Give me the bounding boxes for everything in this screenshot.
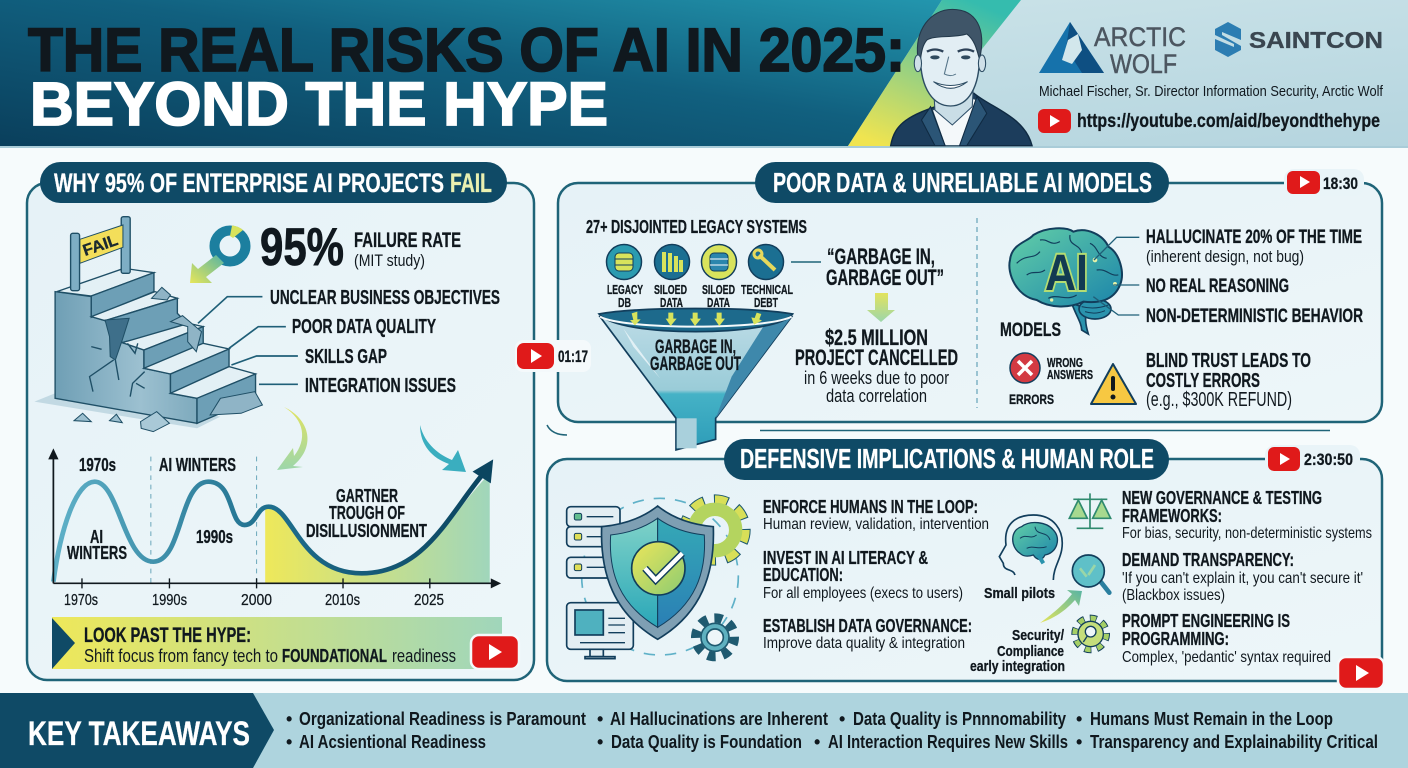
- takeaways row two: •: [286, 732, 292, 752]
- stat source: (MIT study): [354, 251, 425, 270]
- model failure list: [1146, 227, 1363, 327]
- labels: legacy sources: SILOED: [702, 282, 735, 297]
- takeaways row one: •: [839, 709, 845, 729]
- icon: prompt gear: [1075, 619, 1106, 649]
- model failure list: NO REAL REASONING: [1146, 276, 1289, 297]
- takeaways row one: •: [286, 709, 292, 729]
- icon: head with brain: [999, 515, 1062, 580]
- labels: security compliance: Compliance: [997, 643, 1064, 660]
- chart: AI hype cycle: 2025: [414, 592, 444, 609]
- heading: defensive implications: DEFENSIVE IMPLICATIONS & HUMAN ROLE: [740, 443, 1154, 474]
- video timestamp 01:17: 01:17: [558, 347, 588, 366]
- quote: garbage in garbage out: “GARBAGE IN,: [827, 244, 935, 269]
- arrow: up to magnifier: [1040, 590, 1082, 623]
- logo: Arctic Wolf: WOLF: [1110, 49, 1177, 79]
- speaker portrait: [891, 9, 1032, 146]
- icon: YouTube button: [471, 635, 519, 669]
- callout: look past the hype: LOOK PAST THE HYPE:: [84, 624, 251, 647]
- callouts: failure causes: INTEGRATION ISSUES: [305, 375, 456, 397]
- icon: legacy database: [606, 244, 642, 280]
- icon: siloed data database: [702, 244, 736, 280]
- text: blind trust: (e.g., $300K REFUND): [1146, 389, 1292, 411]
- list: right actions: NEW GOVERNANCE & TESTING: [1122, 488, 1322, 508]
- heading: why 95% fail: [40, 162, 507, 203]
- callout: look past the hype: Shift focus from fancy tech to: [84, 646, 278, 666]
- chart: AI hype cycle: TROUGH OF: [329, 503, 405, 523]
- panel: poor data and unreliable models: [558, 162, 1382, 450]
- list: right actions: PROMPT ENGINEERING IS: [1122, 611, 1290, 631]
- takeaways row one: Humans Must Remain in the Loop: [1090, 709, 1333, 729]
- logo: Arctic Wolf: [1039, 22, 1186, 79]
- labels: legacy sources: DEBT: [754, 295, 778, 310]
- funnel label: GARBAGE OUT: [650, 354, 741, 375]
- list: left actions: ESTABLISH DATA GOVERNANCE:: [763, 616, 972, 636]
- video timestamp 2:30:50: 2:30:50: [1304, 450, 1353, 469]
- heading: poor data: POOR DATA & UNRELIABLE AI MODELS: [773, 167, 1152, 198]
- icon: balance scales: [1069, 493, 1111, 528]
- chart: AI hype cycle: AI WINTERS: [159, 455, 236, 475]
- labels: wrong answers: WRONG: [1047, 355, 1083, 370]
- callout: look past the hype: FOUNDATIONAL: [282, 646, 387, 666]
- chart: AI hype cycle: DISILLUSIONMENT: [306, 521, 427, 541]
- title line two: BEYOND THE HYPE: [30, 70, 608, 138]
- icon: magnifying glass: [1072, 555, 1109, 593]
- arrow: yellow curved: [277, 407, 308, 470]
- list: right actions: PROGRAMMING:: [1122, 629, 1229, 649]
- labels: legacy sources: DATA: [707, 295, 730, 310]
- labels: legacy sources: DB: [618, 295, 631, 310]
- icon: YouTube link: [1038, 109, 1071, 133]
- chart: AI hype cycle: GARTNER: [336, 486, 398, 506]
- list: right actions: DEMAND TRANSPARENCY:: [1122, 550, 1294, 570]
- arrow: down to cost: [867, 293, 895, 322]
- list: right actions: 'If you can't explain it, you can't secure it': [1122, 570, 1363, 587]
- labels: wrong answers: ERRORS: [1009, 391, 1054, 407]
- connector arc: [547, 425, 567, 435]
- stat: project cancelled: in 6 weeks due to poor: [804, 368, 949, 388]
- list: left actions: INVEST IN AI LITERACY &: [763, 548, 928, 568]
- list: left actions: Improve data quality & integration: [763, 635, 965, 652]
- stat: project cancelled: $2.5 MILLION: [825, 325, 928, 350]
- footer: key takeaways: [0, 693, 1408, 768]
- icon: AI brain: AI: [1045, 244, 1088, 301]
- quote: garbage in garbage out: GARBAGE OUT”: [826, 265, 944, 290]
- labels: legacy sources: SILOED: [654, 282, 687, 297]
- list: left actions: Human review, validation, intervention: [763, 516, 989, 533]
- icon: technical debt wrench: [748, 244, 784, 280]
- labels: security compliance: Security/: [1012, 627, 1065, 644]
- video timestamp 18:30: 18:30: [1323, 174, 1358, 193]
- chart: AI hype cycle: 1970s: [79, 455, 116, 475]
- label: models: MODELS: [1000, 320, 1061, 341]
- list: right actions: Complex, 'pedantic' syntax required: [1122, 649, 1331, 666]
- text: blind trust: COSTLY ERRORS: [1146, 370, 1260, 392]
- takeaways row one: Organizational Readiness is Paramount: [299, 709, 586, 729]
- takeaways row two: AI Acsientional Readiness: [299, 732, 486, 752]
- takeaways row one: •: [597, 709, 603, 729]
- labels: legacy sources: TECHNICAL: [741, 282, 793, 297]
- labels: security compliance: [970, 627, 1065, 675]
- takeaways row one: Data Quality is Pnnnomability: [853, 709, 1066, 729]
- icon: security shield with gears and servers: [567, 498, 744, 659]
- chart: AI hype cycle: 1970s: [64, 592, 98, 609]
- video timestamp 01:17: [515, 340, 591, 372]
- heading: defensive implications: [724, 439, 1169, 480]
- takeaways row one: AI Hallucinations are Inherent: [610, 709, 828, 729]
- header banner: [0, 0, 1408, 148]
- labels: legacy sources: LEGACY: [607, 282, 643, 297]
- panel: why projects fail: [27, 162, 534, 680]
- stat label: failure rate: FAILURE RATE: [354, 229, 461, 252]
- icon: warning triangle: [1091, 364, 1136, 404]
- arrow: teal curved: [420, 425, 466, 472]
- video timestamp 18:30: [1284, 169, 1364, 196]
- icon: failure donut: [214, 226, 246, 262]
- icon: siloed data bars: [654, 244, 690, 280]
- stat: project cancelled: data correlation: [826, 386, 927, 406]
- funnel label: GARBAGE IN,: [655, 337, 736, 358]
- takeaways row two: AI Interaction Requires New Skills: [828, 732, 1068, 752]
- labels: legacy sources: [607, 282, 793, 310]
- funnel label: [650, 337, 741, 375]
- chart: AI hype cycle: [48, 448, 501, 609]
- callouts: failure causes: UNCLEAR BUSINESS OBJECTIVES: [270, 287, 500, 309]
- labels: security compliance: early integration: [970, 658, 1065, 675]
- list: right actions: (Blackbox issues): [1122, 587, 1225, 604]
- chart: AI hype cycle: 2010s: [325, 592, 360, 609]
- logo: Arctic Wolf: ARCTIC: [1094, 22, 1186, 52]
- takeaways row two: Data Quality is Foundation: [611, 732, 802, 752]
- sign label: fail: FAIL: [81, 232, 121, 260]
- logo: Saintcon: [1215, 22, 1383, 57]
- heading: why 95% fail: WHY 95% OF ENTERPRISE AI PROJECTS: [54, 168, 444, 198]
- model failure list: (inherent design, not bug): [1146, 247, 1304, 266]
- takeaways row one: [286, 709, 1333, 729]
- icon: AI brain: [1009, 228, 1139, 334]
- callouts: failure causes: POOR DATA QUALITY: [292, 316, 436, 338]
- list: left actions: EDUCATION:: [763, 565, 843, 585]
- heading: poor data: [755, 162, 1169, 203]
- stat: project cancelled: PROJECT CANCELLED: [795, 345, 958, 370]
- list: left actions: For all employees (execs to users): [763, 585, 963, 602]
- title line one: THE REAL RISKS OF AI IN 2025:: [28, 16, 905, 84]
- chart: AI hype cycle: 1990s: [152, 592, 187, 609]
- subheading: legacy systems: 27+ DISJOINTED LEGACY SYSTEMS: [586, 217, 807, 237]
- list: left actions: ENFORCE HUMANS IN THE LOOP:: [763, 497, 978, 517]
- quote: garbage in garbage out: [791, 244, 944, 290]
- labels: legacy sources: DATA: [660, 295, 683, 310]
- chart: AI hype cycle: 2000: [241, 592, 272, 609]
- arrow: donut to stairs: [190, 255, 224, 283]
- takeaways row one: •: [1076, 709, 1082, 729]
- icon: funnel: [599, 308, 793, 450]
- takeaways row two: [286, 732, 1378, 752]
- list: right actions: FRAMEWORKS:: [1122, 506, 1222, 526]
- stat: project cancelled: [795, 325, 958, 406]
- callouts: failure causes: SKILLS GAP: [305, 346, 387, 368]
- callout: look past the hype: [52, 617, 502, 669]
- takeaways row two: •: [814, 732, 820, 752]
- label: small pilots: Small pilots: [984, 585, 1055, 602]
- icon: error cross: [1010, 353, 1040, 383]
- chart: AI hype cycle: 1990s: [196, 527, 233, 547]
- list: left actions: [763, 497, 989, 652]
- list: right actions: [1122, 488, 1372, 666]
- logo: Saintcon: SAINTCON: [1249, 27, 1383, 53]
- chart: AI hype cycle: WINTERS: [67, 543, 127, 563]
- chart: AI hype cycle: AI: [90, 527, 103, 547]
- takeaways row two: •: [597, 732, 603, 752]
- video timestamp 2:30:50: [1265, 445, 1360, 473]
- text: blind trust: BLIND TRUST LEADS TO: [1146, 350, 1311, 372]
- text: blind trust: [1146, 350, 1311, 411]
- icon: crumbling stairs with fail sign: [34, 217, 262, 432]
- callouts: failure causes: [198, 287, 500, 397]
- callout: look past the hype: readiness: [392, 646, 456, 666]
- heading: why 95% fail: FAIL: [450, 168, 492, 198]
- labels: wrong answers: [1009, 355, 1093, 407]
- icon: YouTube button: [1338, 657, 1384, 689]
- stat: 95%: 95%: [260, 218, 344, 277]
- footer heading: KEY TAKEAWAYS: [28, 715, 250, 753]
- takeaways row two: •: [1076, 732, 1082, 752]
- labels: wrong answers: ANSWERS: [1047, 367, 1093, 382]
- panel: defensive implications: [547, 439, 1384, 689]
